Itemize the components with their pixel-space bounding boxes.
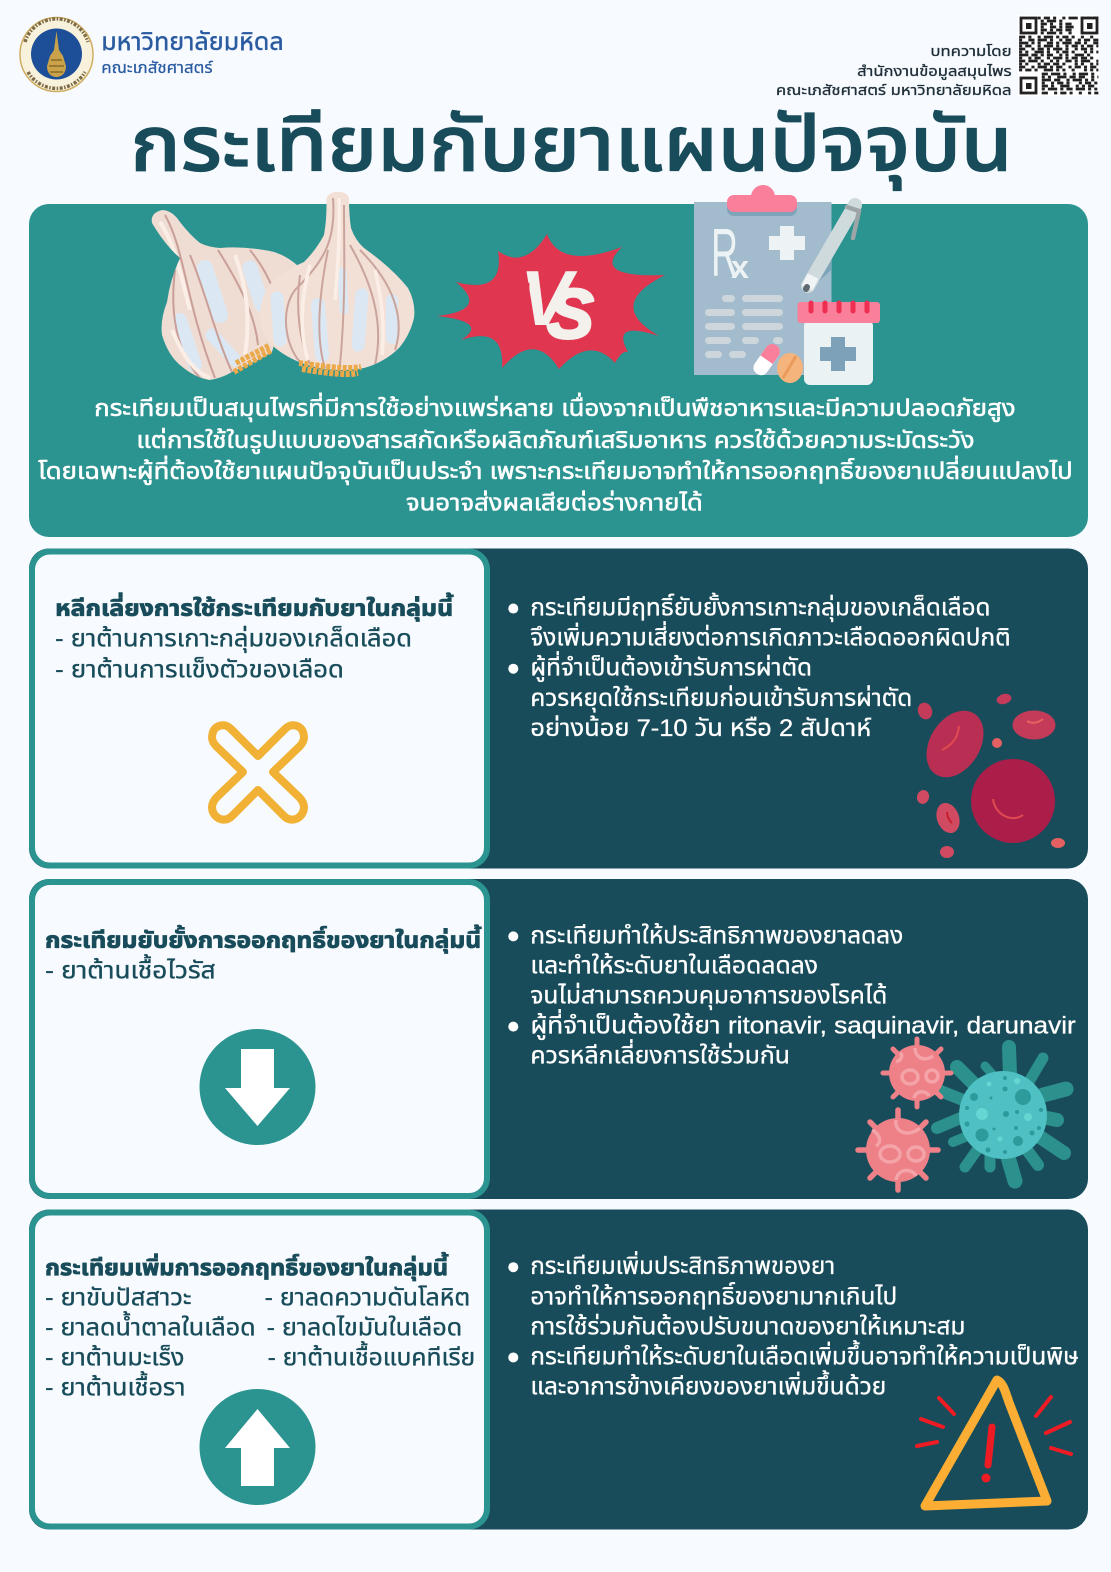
illustration: garlic bulbs	[145, 188, 420, 385]
icon: VS burst: V	[520, 254, 578, 342]
text: inhibits rationale: จนไม่สามารถควบคุมอาการของโรคได้	[530, 982, 887, 1011]
heading and list: increases: - ยาลดความดันโลหิต	[265, 1284, 470, 1311]
intro text: กระเทียมเป็นสมุนไพรที่มีการใช้อย่างแพร่หลาย เนื่องจากเป็นพืชอาหารและมีความปลอดภัยสูง	[94, 392, 1016, 423]
illustration: prescription and medicine: x	[731, 249, 749, 285]
heading and list: avoid: หลีกเลี่ยงการใช้กระเทียมกับยาในกลุ่มนี้	[55, 592, 454, 622]
text: inhibits rationale: และทำให้ระดับยาในเลือดลดลง	[530, 952, 818, 979]
icon: VS burst: S	[547, 275, 594, 353]
panel: garlic inhibits drug action	[29, 879, 1088, 1199]
heading and list: increases: - ยาต้านมะเร็ง	[45, 1343, 184, 1371]
author credit	[776, 44, 1012, 99]
heading and list: increases: - ยาต้านเชื้อรา	[45, 1371, 185, 1402]
QR code	[1018, 15, 1099, 96]
illustration: prescription and medicine: R	[711, 215, 738, 291]
author credit: สำนักงานข้อมูลสมุนไพร	[857, 64, 1012, 80]
heading and list: inhibits: กระเทียมยับยั้งการออกฤทธิ์ของยาในกลุ่มนี้	[45, 924, 482, 953]
icon: down arrow	[200, 1029, 316, 1145]
text: avoid rationale: อย่างน้อย 7-10 วัน หรือ 2 สัปดาห์	[530, 714, 872, 742]
intro text: แต่การใช้ในรูปแบบของสารสกัดหรือผลิตภัณฑ์เสริมอาหาร ควรใช้ด้วยความระมัดระวัง	[136, 427, 974, 455]
icon: VS burst	[437, 234, 665, 369]
text: increases rationale: อาจทำให้การออกฤทธิ์ของยามากเกินไป	[530, 1282, 897, 1310]
illustration: blood cells	[915, 692, 1065, 858]
heading and list: increases	[45, 1252, 475, 1402]
author credit: คณะเภสัชศาสตร์ มหาวิทยาลัยมหิดล	[776, 83, 1012, 99]
icon: up arrow	[200, 1389, 316, 1505]
author credit: บทความโดย	[930, 44, 1012, 60]
heading and list: increases: - ยาต้านเชื้อแบคทีเรีย	[268, 1341, 475, 1371]
university name: มหาวิทยาลัยมหิดล	[101, 28, 284, 56]
text: avoid rationale: ผู้ที่จำเป็นต้องเข้ารับการผ่าตัด	[530, 651, 812, 683]
text: avoid rationale: จึงเพิ่มความเสี่ยงต่อการเกิดภาวะเลือดออกผิดปกติ	[530, 621, 1011, 652]
heading and list: increases: - ยาลดไขมันในเลือด	[267, 1314, 462, 1341]
text: avoid rationale: ควรหยุดใช้กระเทียมก่อนเข้ารับการผ่าตัด	[530, 684, 912, 713]
panel: garlic increases drug action	[29, 1210, 1088, 1530]
text: inhibits rationale: กระเทียมทำให้ประสิทธิภาพของยาลดลง	[530, 922, 903, 949]
text: inhibits rationale: ควรหลีกเลี่ยงการใช้ร่วมกัน	[530, 1039, 790, 1070]
heading and list: increases: - ยาขับปัสสาวะ	[45, 1284, 191, 1311]
text: increases rationale: การใช้ร่วมกันต้องปรับขนาดของยาให้เหมาะสม	[530, 1312, 965, 1340]
heading and list: avoid: - ยาต้านการแข็งตัวของเลือด	[55, 656, 344, 684]
heading and list: avoid	[55, 592, 454, 684]
intro text: จนอาจส่งผลเสียต่อร่างกายได้	[406, 489, 703, 515]
text: inhibits rationale: ผู้ที่จำเป็นต้องใช้ยา ritonavir, saquinavir, darunavir	[530, 1009, 1076, 1041]
illustration: viruses	[858, 1039, 1066, 1190]
heading and list: inhibits: - ยาต้านเชื้อไวรัส	[45, 954, 216, 984]
university name	[101, 28, 284, 77]
text: increases rationale: กระเทียมทำให้ระดับยาในเลือดเพิ่มขึ้นอาจทำให้ความเป็นพิษ	[530, 1339, 1079, 1370]
university name: คณะเภสัชศาสตร์	[101, 59, 213, 77]
title: กระเทียมกับยาแผนปัจจุบัน	[130, 101, 1013, 190]
text: avoid rationale: กระเทียมมีฤทธิ์ยับยั้งการเกาะกลุ่มของเกล็ดเลือด	[530, 592, 991, 623]
heading and list: increases: - ยาลดน้ำตาลในเลือด	[45, 1310, 256, 1341]
logo: Mahidol University seal	[20, 18, 93, 92]
icon: warning triangle	[917, 1380, 1071, 1506]
panel: introduction	[29, 185, 1088, 537]
intro text: โดยเฉพาะผู้ที่ต้องใช้ยาแผนปัจจุบันเป็นประจำ เพราะกระเทียมอาจทำให้การออกฤทธิ์ของยาเปลี่ยนแปลงไป	[38, 455, 1073, 486]
heading and list: increases: กระเทียมเพิ่มการออกฤทธิ์ของยาในกลุ่มนี้	[45, 1252, 449, 1281]
intro text	[38, 392, 1073, 515]
panel: avoid combination	[29, 548, 1088, 868]
icon: X mark	[212, 725, 304, 820]
text: avoid rationale	[508, 592, 1011, 742]
text: increases rationale: และอาการข้างเคียงของยาเพิ่มขึ้นด้วย	[530, 1370, 886, 1401]
heading and list: avoid: - ยาต้านการเกาะกลุ่มของเกล็ดเลือด	[55, 625, 412, 654]
heading and list: inhibits	[45, 924, 482, 984]
text: inhibits rationale	[508, 922, 1076, 1070]
text: increases rationale	[508, 1251, 1079, 1401]
text: increases rationale: กระเทียมเพิ่มประสิทธิภาพของยา	[530, 1251, 835, 1280]
illustration: prescription and medicine	[694, 185, 880, 385]
